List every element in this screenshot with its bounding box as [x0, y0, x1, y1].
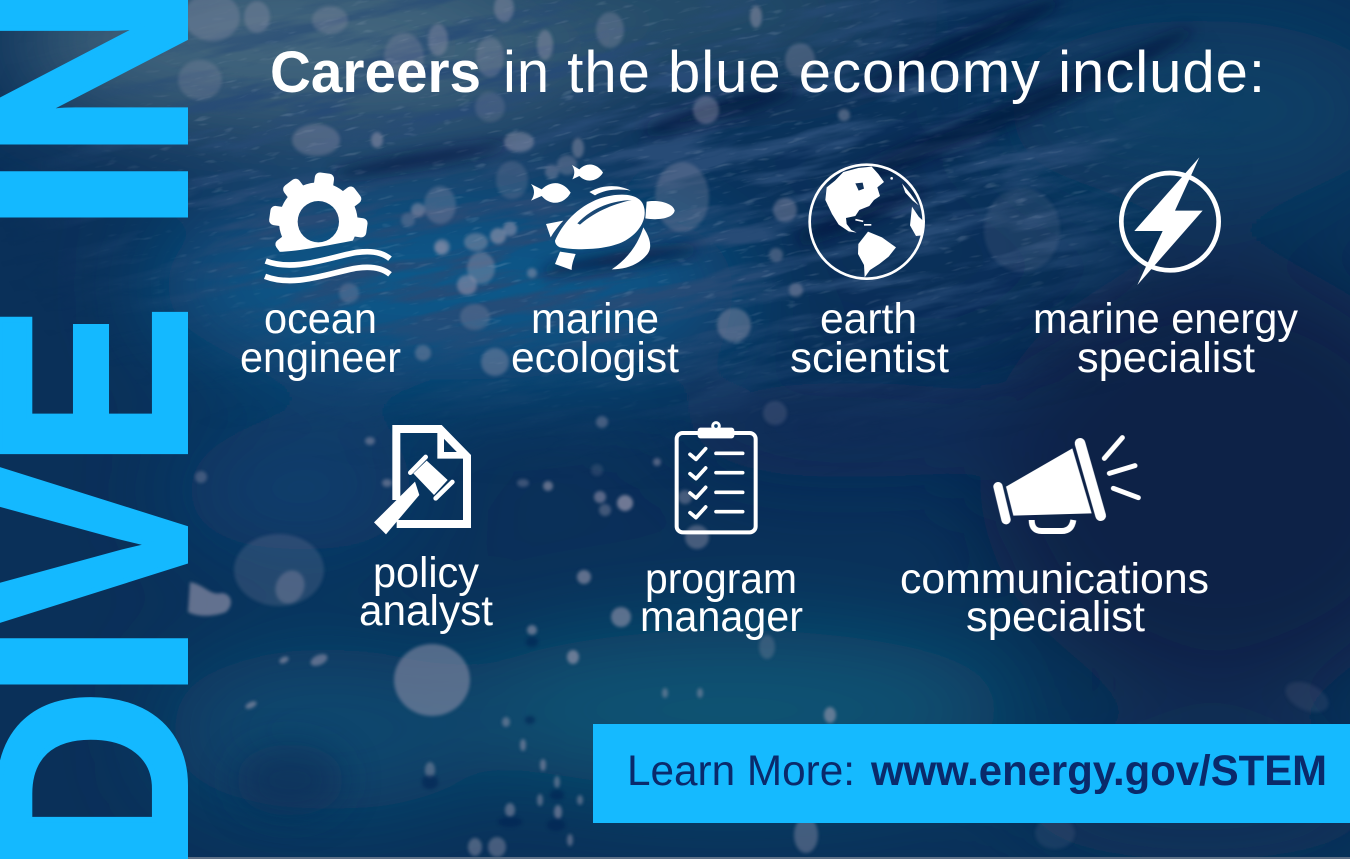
label: earth scientist — [790, 295, 949, 382]
icon: document with gavel — [374, 429, 467, 534]
career: policy analyst — [359, 429, 493, 635]
label: marine energy specialist: specialist — [1077, 334, 1255, 382]
label: program manager: program — [645, 555, 797, 603]
title: Careers — [270, 40, 481, 105]
career: communications specialist — [900, 438, 1209, 641]
label: marine energy specialist: marine energy — [1033, 295, 1298, 343]
label: communications specialist: specialist — [966, 593, 1145, 641]
label: communications specialist: communications — [900, 555, 1209, 603]
label: ocean engineer: engineer — [240, 334, 401, 382]
career: marine energy specialist — [1033, 157, 1298, 382]
icon: lightning bolt in circle — [1121, 157, 1219, 285]
label: ocean engineer: ocean — [264, 295, 377, 343]
label: communications specialist — [900, 555, 1209, 641]
label: marine energy specialist — [1033, 295, 1298, 382]
label: program manager: manager — [640, 593, 803, 641]
title: in the blue economy include: — [503, 40, 1265, 105]
icon: megaphone — [998, 438, 1138, 531]
career: earth scientist — [790, 165, 949, 382]
label: marine ecologist: ecologist — [511, 334, 679, 382]
icon: clipboard checklist — [677, 423, 756, 532]
label: earth scientist: earth — [820, 295, 917, 343]
career: ocean engineer — [240, 167, 401, 382]
learn more text: Learn More: — [627, 747, 855, 795]
label: marine ecologist — [511, 295, 679, 382]
learn more text: www.energy.gov/STEM — [870, 747, 1327, 795]
call to action banner — [593, 724, 1350, 823]
label: earth scientist: scientist — [790, 334, 949, 382]
label: policy analyst — [359, 549, 493, 635]
icon: globe — [810, 165, 924, 279]
label: policy analyst: analyst — [359, 587, 493, 635]
label: program manager — [640, 555, 803, 641]
icon: gear and waves — [263, 167, 390, 281]
learn more text — [627, 747, 1327, 795]
vertical heading: DIVE IN — [0, 0, 243, 859]
top texture — [96, 0, 1145, 398]
career: marine ecologist — [511, 165, 679, 382]
label: marine ecologist: marine — [531, 295, 659, 343]
label: ocean engineer — [240, 295, 401, 382]
label: policy analyst: policy — [373, 549, 479, 597]
icon: sea turtle and fish — [531, 165, 675, 270]
career: program manager — [640, 423, 803, 641]
